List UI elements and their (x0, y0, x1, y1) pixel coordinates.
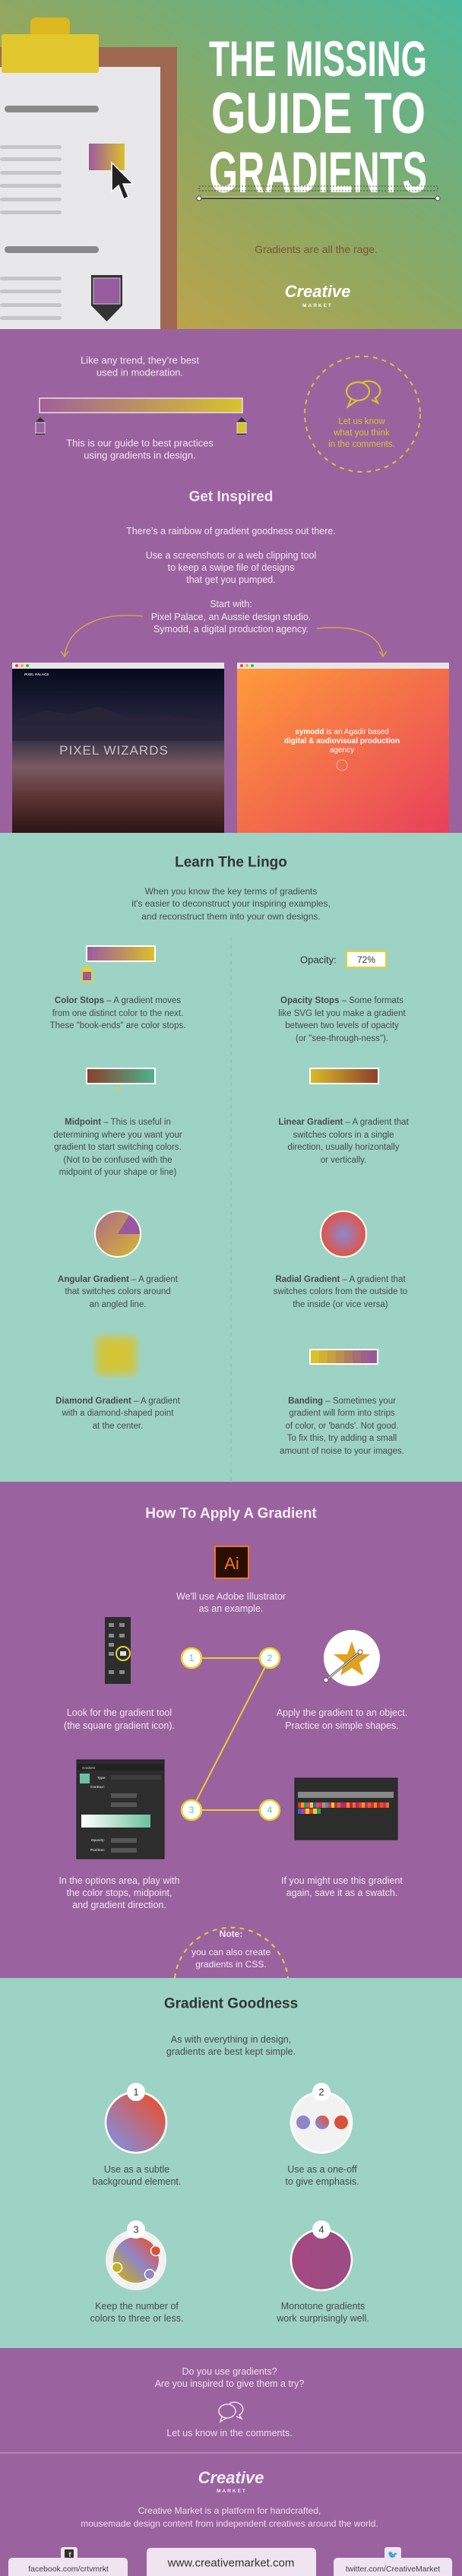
step 4 text: If you might use this gradient (281, 1875, 403, 1886)
tip 4: Monotone gradients (281, 2301, 365, 2312)
tip 3 (90, 2220, 183, 2324)
heading: How To Apply A Gradient: How To Apply A Gradient (145, 1506, 317, 1521)
term: angular gradient: that switches colors around (65, 1287, 171, 1296)
term: color stops (50, 946, 185, 1030)
screenshot: Pixel Palace: PIXEL PALACE (24, 672, 49, 676)
step 1 text: Look for the gradient tool (67, 1707, 172, 1718)
step 1 icon: toolbar (105, 1617, 131, 1684)
callout: comments circle: what you think (333, 429, 390, 438)
term: linear gradient: or vertically. (321, 1156, 366, 1165)
tip 4: 4 (318, 2223, 324, 2236)
logo: Creative Market: MARKET (302, 303, 333, 309)
term: radial gradient: switches colors from the outside to (274, 1287, 407, 1296)
inspired text: There’s a rainbow of gradient goodness out there. (126, 526, 336, 536)
term: banding: amount of noise to your images. (280, 1447, 404, 1456)
step 3 text: In the options area, play with (59, 1875, 180, 1886)
goodness intro: As with everything in design, (171, 2034, 291, 2045)
footer: twitter: twitter.com/CreativeMarket (346, 2565, 440, 2574)
screenshot: Pixel Palace: PIXEL WIZARDS (59, 743, 169, 758)
step 3 text (59, 1875, 180, 1910)
footer logo: MARKET (217, 2489, 247, 2494)
inspired text: Start with: (210, 599, 252, 609)
term: banding: of color, or 'bands'. Not good. (286, 1422, 398, 1431)
inspired text: that get you pumped. (186, 574, 276, 585)
step 3 icon: gradient panel: Gradient (82, 1766, 96, 1770)
tip 4 (276, 2220, 369, 2324)
tip 2: Use as a one-off (287, 2164, 357, 2175)
footer logo: Creative (198, 2468, 264, 2487)
heading: Gradient Goodness: Gradient Goodness (164, 1995, 298, 2012)
term: radial gradient: the inside (or vice versa) (293, 1300, 388, 1309)
inspired text: Pixel Palace, an Aussie design studio. (151, 612, 311, 622)
callout: note: you can also create (191, 1947, 271, 1957)
callout: comments circle (305, 356, 420, 472)
intro text bottom: using gradients in design. (84, 450, 196, 460)
tip 1 (93, 2083, 181, 2187)
panel: how to apply (0, 1482, 462, 1978)
closing CTA: Let us know in the comments. (166, 2428, 293, 2438)
closing question: Do you use gradients? (182, 2366, 277, 2377)
term: diamond gradient (55, 1337, 181, 1431)
term: radial gradient: Radial Gradient – A gradient that (275, 1275, 406, 1284)
intro panel (12, 354, 449, 833)
term: midpoint: gradient to start switching colors. (54, 1143, 182, 1152)
step 4 icon: swatches panel (295, 1778, 397, 1840)
step 4 badge (260, 1800, 280, 1820)
term: banding (280, 1349, 404, 1456)
screenshot: Symodd: agency (330, 746, 354, 755)
arrow left (61, 616, 143, 657)
footer: facebook: f (68, 2551, 71, 2559)
step 3 icon: gradient panel: Position: (90, 1848, 106, 1852)
term: opacity stops: 72% (357, 954, 375, 965)
tip 4: work surprisingly well. (276, 2313, 369, 2324)
lingo intro: it's easier to deconstruct your inspiring examples, (131, 898, 331, 909)
header panel (0, 0, 462, 329)
gradient handle line (197, 186, 440, 201)
term: midpoint: determining where you want your (53, 1131, 182, 1140)
term: linear gradient: Linear Gradient – A gradient that (278, 1118, 409, 1127)
step 2 text: Practice on simple shapes. (285, 1720, 399, 1731)
inspired text: Use a screenshots or a web clipping tool (146, 550, 316, 561)
term: opacity stops: like SVG let you make a gradient (278, 1009, 407, 1018)
term: angular gradient (58, 1211, 179, 1309)
goodness intro (166, 2034, 296, 2057)
step 1 badge: 1 (189, 1653, 195, 1663)
clipboard illustration (0, 17, 177, 329)
step 1 text: (the square gradient icon). (64, 1720, 175, 1731)
term: color stops: Color Stops – A gradient moves (55, 996, 181, 1005)
footer: facebook: facebook.com/crtvmrkt (28, 2565, 109, 2574)
step 2 badge: 2 (267, 1653, 273, 1663)
connector path (191, 1658, 270, 1810)
panel: learn the lingo (0, 833, 462, 1483)
term: opacity stops (278, 951, 407, 1043)
footer description: mousemade design content from independent creatives around the world. (81, 2518, 378, 2529)
term: color stops: from one distinct color to the next. (52, 1009, 183, 1018)
intro text top (81, 354, 199, 378)
inspired text (126, 526, 336, 635)
footer description: Creative Market is a platform for handcrafted, (138, 2505, 321, 2516)
term: midpoint: (Not to be confused with the (63, 1156, 172, 1165)
term: opacity stops: between two levels of opacity (285, 1021, 399, 1030)
step 3 icon: gradient panel: Type: (97, 1776, 106, 1780)
text: illustrator: We'll use Adobe Illustrator (176, 1591, 286, 1602)
panel: gradient goodness (0, 1978, 462, 2348)
intro text top: used in moderation. (97, 366, 183, 378)
step 2 badge (260, 1648, 280, 1668)
arrow right (317, 628, 387, 657)
screenshot: Symodd: digital & audiovisual production (284, 737, 400, 745)
icon: Adobe Illustrator: Ai (224, 1554, 239, 1573)
intro text bottom (66, 438, 214, 460)
step 2 text (277, 1707, 407, 1731)
callout: note: gradients in CSS. (195, 1959, 267, 1970)
step 2 text: Apply the gradient to an object. (277, 1707, 407, 1718)
lingo intro: When you know the key terms of gradients (145, 886, 317, 897)
panel: closing (0, 2348, 462, 2576)
step 4 text (281, 1875, 403, 1898)
term: opacity stops: (or "see-through-ness"). (296, 1034, 388, 1043)
step 3 badge (182, 1800, 201, 1820)
tip 3: colors to three or less. (90, 2313, 183, 2324)
term: radial gradient (274, 1211, 407, 1309)
term: angular gradient: Angular Gradient – A gradient (58, 1275, 179, 1284)
tip 1: 1 (133, 2087, 139, 2097)
term: midpoint (53, 1068, 182, 1177)
step 1 badge (182, 1648, 201, 1668)
icon: chat bubbles (219, 2402, 243, 2422)
step 3 icon: gradient panel: Contour: (90, 1785, 105, 1789)
logo: Creative Market: Creative (285, 282, 350, 301)
step 3 text: and gradient direction. (72, 1900, 166, 1910)
step 3 icon: gradient panel: Opacity: (91, 1838, 106, 1842)
term: linear gradient: direction, usually horizontally (287, 1143, 400, 1152)
callout: note: Note: (220, 1929, 242, 1939)
text: illustrator: as an example. (199, 1603, 263, 1614)
tip 2: 2 (318, 2087, 324, 2097)
term: linear gradient (278, 1068, 409, 1165)
screenshot: Symodd: symodd is an Agadir based (295, 728, 389, 736)
intro text bottom: This is our guide to best practices (66, 438, 214, 448)
step 1 text (64, 1707, 175, 1731)
callout: note (175, 1928, 288, 1978)
screenshot: Pixel Palace (12, 663, 224, 833)
tip 3: Keep the number of (95, 2301, 179, 2312)
lingo intro (131, 886, 331, 922)
screenshot: Symodd (237, 663, 449, 833)
callout: comments circle: Let us know (338, 417, 385, 426)
gradient bar with stops (36, 398, 246, 435)
footer description (81, 2505, 378, 2529)
closing question (155, 2366, 304, 2389)
intro text top: Like any trend, they’re best (81, 354, 199, 366)
inspired text: Symodd, a digital production agency. (153, 624, 309, 635)
tip 1: Use as a subtle (104, 2164, 169, 2175)
tip 1: background element. (93, 2176, 181, 2187)
term: midpoint: Midpoint – This is useful in (65, 1118, 171, 1127)
term: color stops: These "book-ends" are color stops. (50, 1021, 185, 1030)
inspired text: to keep a swipe file of designs (168, 562, 294, 573)
term: banding: Banding – Sometimes your (288, 1397, 396, 1406)
term: midpoint: midpoint of your shape or line) (59, 1168, 177, 1177)
text: illustrator (176, 1591, 286, 1614)
term: diamond gradient: Diamond Gradient – A gradient (55, 1397, 181, 1406)
term: diamond gradient: at the center. (93, 1422, 143, 1431)
footer: website: www.creativemarket.com (167, 2556, 294, 2570)
term: banding: To fix this, try adding a small (287, 1434, 397, 1443)
heading: Get Inspired: Get Inspired (189, 489, 273, 505)
tip 2 (285, 2083, 359, 2187)
footer: website (147, 2548, 316, 2576)
goodness intro: gradients are best kept simple. (166, 2046, 296, 2057)
step 4 text: again, save it as a swatch. (286, 1888, 397, 1898)
step 3 icon: gradient panel (77, 1760, 164, 1859)
term: opacity stops: Opacity: (300, 954, 337, 965)
icon: Adobe Illustrator (215, 1546, 248, 1578)
heading: Learn The Lingo: Learn The Lingo (175, 854, 287, 871)
footer: twitter (334, 2547, 452, 2576)
term: angular gradient: an angled line. (90, 1300, 146, 1309)
step 3 text: the color stops, midpoint, (67, 1888, 172, 1898)
closing question: Are you inspired to give them a try? (155, 2378, 304, 2389)
footer: twitter: 🐦 (388, 2551, 398, 2560)
title (209, 30, 427, 205)
step 2 icon: star (324, 1630, 380, 1686)
term: opacity stops: Opacity Stops – Some formats (280, 996, 403, 1005)
subtitle: Gradients are all the rage. (255, 243, 378, 255)
tip 2: to give emphasis. (285, 2176, 359, 2187)
step 4 badge: 4 (267, 1805, 273, 1815)
term: diamond gradient: with a diamond-shaped point (61, 1409, 174, 1418)
lingo intro: and reconstruct them into your own designs. (141, 911, 321, 922)
tip 3: 3 (133, 2223, 139, 2236)
footer: facebook (8, 2547, 128, 2576)
step 3 badge: 3 (189, 1805, 195, 1815)
callout: comments circle: in the comments. (328, 440, 395, 449)
term: banding: gradient will form into strips (289, 1409, 395, 1418)
term: linear gradient: switches colors in a single (293, 1131, 394, 1140)
